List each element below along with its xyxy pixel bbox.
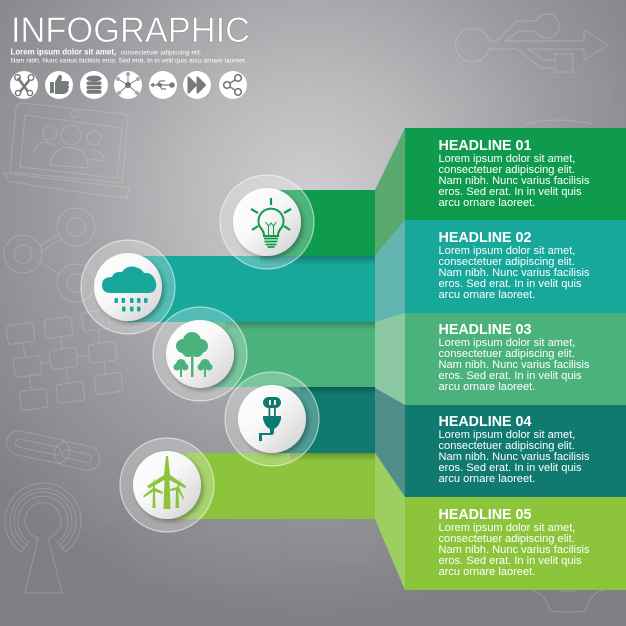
panel: headline 03 bbox=[405, 313, 626, 405]
panel: headline 02: Lorem ipsum dolor sit amet, bbox=[438, 245, 575, 257]
panel: headline 05: eros. Sed erat. In in velit quis bbox=[438, 555, 582, 567]
panel: headline 02: Nam nibh. Nunc varius facilisis bbox=[438, 267, 590, 279]
panel: headline 04: arcu ornare laoreet. bbox=[438, 473, 535, 485]
icon: share bbox=[219, 71, 247, 99]
badge: light bulb bbox=[220, 175, 314, 269]
icon: wind turbines bbox=[143, 456, 186, 509]
icon: wrenches bbox=[10, 71, 38, 99]
panel: headline 05: arcu ornare laoreet. bbox=[438, 566, 535, 578]
icon: hub network bbox=[114, 71, 142, 99]
panel: headline 04: consectetuer adipiscing elit. bbox=[438, 440, 575, 452]
fold panels bbox=[375, 128, 405, 590]
icon: thumbs up bbox=[45, 71, 73, 99]
panel: headline 05: Nam nibh. Nunc varius facilisis bbox=[438, 544, 590, 556]
panel: headline 03: eros. Sed erat. In in velit quis bbox=[438, 370, 582, 382]
background icon: chain link bbox=[4, 429, 102, 473]
panel: headline 03: HEADLINE 03 bbox=[438, 322, 531, 338]
background icon: usb bbox=[455, 14, 608, 72]
panel: headline 04: Nam nibh. Nunc varius facilisis bbox=[438, 451, 590, 463]
background icon: gear bbox=[525, 120, 603, 612]
panel: headline 02: arcu ornare laoreet. bbox=[438, 289, 535, 301]
background icon: flow chart bbox=[6, 309, 123, 411]
panel: headline 05: consectetuer adipiscing elit. bbox=[438, 533, 575, 545]
subtitle text: Nam nibh. Nunc varius facilisis eros. Sed erat. In in velit quis arcu ornare laoreet. bbox=[10, 58, 247, 64]
ribbon shadows bbox=[225, 256, 375, 461]
panel: headline 02: HEADLINE 02 bbox=[438, 230, 531, 246]
panel: headline 04 bbox=[405, 405, 626, 497]
icon: trees bbox=[174, 332, 212, 377]
panel: headline 01: arcu ornare laoreet. bbox=[438, 197, 535, 209]
badge: plug bbox=[225, 372, 319, 466]
ribbon bar 4 bbox=[272, 387, 376, 453]
subtitle text bbox=[10, 42, 247, 64]
title: INFOGRAPHIC bbox=[11, 10, 250, 50]
background icon: wireless key tower bbox=[5, 483, 81, 593]
panel: headline 04: Lorem ipsum dolor sit amet, bbox=[438, 429, 575, 441]
icon: database bbox=[80, 71, 108, 99]
ribbon bar 2 bbox=[128, 256, 376, 322]
panel: headline 04: eros. Sed erat. In in velit quis bbox=[438, 462, 582, 474]
panel: headline 02: eros. Sed erat. In in velit quis bbox=[438, 278, 582, 290]
icon: light bulb bbox=[251, 198, 291, 247]
panel: headline 03: arcu ornare laoreet. bbox=[438, 381, 535, 393]
icon: usb symbol bbox=[149, 71, 177, 99]
subtitle text: Lorem ipsum dolor sit amet, consectetuer adipiscing elit. bbox=[10, 42, 202, 58]
panel: headline 05 bbox=[405, 497, 626, 590]
ribbon bar 1 bbox=[267, 190, 376, 256]
panel: headline 01: HEADLINE 01 bbox=[438, 138, 531, 154]
panel: headline 03: consectetuer adipiscing elit. bbox=[438, 348, 575, 360]
panel: headline 01: eros. Sed erat. In in velit quis bbox=[438, 186, 582, 198]
panel: headline 01: Nam nibh. Nunc varius facilisis bbox=[438, 175, 590, 187]
panel: headline 01: Lorem ipsum dolor sit amet, bbox=[438, 153, 575, 165]
ribbon bar 3 bbox=[200, 322, 376, 387]
panel: headline 03: Nam nibh. Nunc varius facilisis bbox=[438, 359, 590, 371]
badge: trees bbox=[153, 307, 247, 401]
panel: headline 02 bbox=[405, 220, 626, 313]
background icon: laptop with people bbox=[4, 103, 129, 198]
ribbon bar 5 bbox=[167, 453, 376, 519]
panel: headline 01 bbox=[405, 128, 626, 220]
badge: rain cloud bbox=[81, 240, 175, 334]
panel: headline 02: consectetuer adipiscing elit. bbox=[438, 256, 575, 268]
panel: headline 03: Lorem ipsum dolor sit amet, bbox=[438, 337, 575, 349]
icon: rain cloud bbox=[102, 267, 156, 312]
panel: headline 05: HEADLINE 05 bbox=[438, 507, 531, 523]
icon row bbox=[10, 71, 247, 99]
icon: plug bbox=[259, 397, 281, 441]
panel: headline 04: HEADLINE 04 bbox=[438, 414, 531, 430]
badge: wind turbines bbox=[120, 438, 214, 532]
panel: headline 01: consectetuer adipiscing elit. bbox=[438, 164, 575, 176]
panel: headline 05: Lorem ipsum dolor sit amet, bbox=[438, 522, 575, 534]
background grid squares bbox=[82, 60, 610, 584]
icon: fast forward bbox=[183, 71, 211, 99]
background icon: share network bbox=[4, 208, 95, 302]
